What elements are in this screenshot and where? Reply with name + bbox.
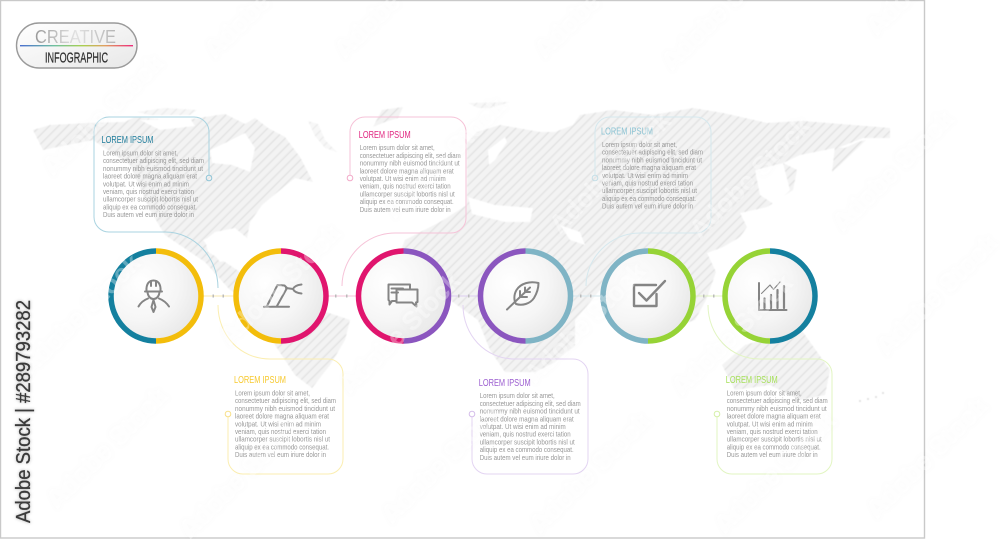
text block: purple: ullamcorper suscipit lobortis nisl ut [480,437,575,446]
logo word: creative: CREATIVE [35,27,116,47]
connector dashes between circles [203,294,723,298]
logo badge [16,23,137,68]
text block: sky [602,140,703,211]
text block: blue: ullamcorper suscipit lobortis nisl ut [103,195,198,204]
text block: blue: Duis autem vel eum iriure dolor in [103,210,194,219]
text block: purple: nonummy nibh euismod tincidunt ut [480,407,580,416]
text block: pink: nonummy nibh euismod tincidunt ut [360,159,460,168]
circle 1: worker [111,251,201,341]
icon: chat bubbles [388,284,418,306]
watermarks: Adobe Stock [665,267,799,401]
watermarks: Adobe Stock [333,265,467,399]
text block: green: Duis autem vel eum iriure dolor in [727,450,818,459]
watermarks: Adobe Stock [683,110,817,244]
text block: sky: Duis autem vel eum iriure dolor in [602,202,693,211]
icon: checkbox [634,281,665,306]
world map [33,102,890,402]
text block: sky: consectetuer adipiscing elit, sed diam [602,148,703,157]
panel: green text box [708,305,832,474]
text block: green [727,388,828,459]
heading: yellow: LOREM IPSUM [234,375,286,386]
text block: pink: Duis autem vel eum iriure dolor in [360,205,451,214]
logo rainbow rule [20,45,133,46]
panel: pink text box [342,117,466,286]
text block: green: ullamcorper suscipit lobortis nisl ut [727,435,822,444]
text block: pink: volutpat. Ut wisi enim ad minim [360,174,446,183]
text block: pink: veniam, quis nostrud exerci tation [360,182,451,191]
text block: blue: veniam, quis nostrud exerci tation [103,187,194,196]
icon: leaf [507,282,538,310]
text block: purple: Duis autem vel eum iriure dolor in [480,453,571,462]
watermarks: Adobe Stock [378,90,512,224]
text block: purple: volutpat. Ut wisi enim ad minim [480,422,566,431]
text block: pink: aliquip ex ea commodo consequat. [360,197,454,206]
text block: green: veniam, quis nostrud exerci tation [727,427,818,436]
stock id side label: Adobe Stock | #289793282 [13,300,35,523]
circle 6: chart [725,251,815,341]
text block: purple: veniam, quis nostrud exerci tation [480,430,571,439]
text block: yellow [235,388,336,459]
watermarks: Adobe Stock [860,390,994,524]
watermarks: Adobe Stock [518,255,652,389]
watermarks: Adobe Stock [375,395,509,529]
panel: sky text box [586,117,711,286]
text block: sky: volutpat. Ut wisi enim ad minim [602,171,688,180]
text block: sky: veniam, quis nostrud exerci tation [602,178,693,188]
watermarks: Adobe Stock [13,247,147,381]
text block: yellow: Lorem ipsum dolor sit amet, [235,388,310,398]
text block: blue: Lorem ipsum dolor sit amet, [103,148,178,158]
text block: sky: Lorem ipsum dolor sit amet, [602,140,677,149]
heading: purple: LOREM IPSUM [479,378,531,389]
circle 3: chat [359,251,449,341]
panel: purple text box [463,305,588,474]
logo word: infographic: INFOGRAPHIC [45,50,108,66]
text block: yellow: aliquip ex ea commodo consequat. [235,442,329,451]
text block: sky: ullamcorper suscipit lobortis nisl ut [602,186,697,195]
text block: blue: consectetuer adipiscing elit, sed diam [103,156,204,165]
text block: sky: nonummy nibh euismod tincidunt ut [602,155,702,164]
text block: purple: aliquip ex ea commodo consequat. [480,445,574,454]
text block: purple: laoreet dolore magna aliquam erat [480,414,574,423]
text block: pink [360,143,461,214]
text block: green: Lorem ipsum dolor sit amet, [727,388,802,398]
text block: green: aliquip ex ea commodo consequat. [727,442,821,451]
circle 4: leaf [481,251,570,341]
text block: blue: laoreet dolore magna aliquam erat [103,172,197,181]
text block: purple: Lorem ipsum dolor sit amet, [480,391,555,400]
watermarks: Adobe Stock [708,405,842,539]
text block: pink: laoreet dolore magna aliquam erat [360,166,454,175]
text block: yellow: laoreet dolore magna aliquam erat [235,412,329,421]
text block: green: volutpat. Ut wisi enim ad minim [727,419,813,428]
text block: pink: consectetuer adipiscing elit, sed diam [360,151,461,160]
watermarks: Adobe Stock [40,380,174,514]
icon: worker with helmet [138,280,169,312]
text block: yellow: volutpat. Ut wisi enim ad minim [235,419,321,428]
text block: green: nonummy nibh euismod tincidunt ut [727,404,827,413]
text block: pink: ullamcorper suscipit lobortis nisl ut [360,189,455,198]
heading: green: LOREM IPSUM [726,375,778,386]
text block: pink: Lorem ipsum dolor sit amet, [360,143,435,152]
heading: blue: LOREM IPSUM [102,135,154,146]
text block: blue: volutpat. Ut wisi enim ad minim [103,179,189,188]
watermarks: Adobe Stock [36,47,170,181]
text block: blue: aliquip ex ea commodo consequat. [103,202,197,211]
text block: green: laoreet dolore magna aliquam erat [727,412,821,421]
watermarks: Adobe Stock [826,103,960,237]
heading: sky: LOREM IPSUM [601,126,653,138]
text block: green: consectetuer adipiscing elit, sed diam [727,396,828,405]
text block: sky: laoreet dolore magna aliquam erat [602,163,696,172]
text block: purple: consectetuer adipiscing elit, sed diam [480,399,581,408]
circle 5: checkbox [603,251,693,341]
circle 2: robot arm [236,251,326,341]
text block: yellow: veniam, quis nostrud exerci tation [235,427,326,436]
text block: yellow: ullamcorper suscipit lobortis nisl ut [235,435,330,444]
text block: blue: nonummy nibh euismod tincidunt ut [103,164,203,173]
icon: bar chart [759,282,786,310]
panel: yellow text box [218,305,343,474]
text block: yellow: Duis autem vel eum iriure dolor in [235,450,326,459]
watermarks: Adobe Stock [543,105,677,239]
heading: pink: LOREM IPSUM [359,130,411,141]
watermarks: Adobe Stock [213,217,347,351]
icon: robot arm [264,284,302,307]
text block: yellow: nonummy nibh euismod tincidunt ut [235,404,335,413]
watermarks: Adobe Stock [523,405,657,539]
text block: yellow: consectetuer adipiscing elit, sed diam [235,396,336,405]
text block: purple [480,391,581,462]
panel: blue text box [94,117,218,288]
text block: blue [103,148,204,219]
text block: sky: aliquip ex ea commodo consequat. [602,194,696,203]
watermarks: Adobe Stock [870,227,1000,361]
